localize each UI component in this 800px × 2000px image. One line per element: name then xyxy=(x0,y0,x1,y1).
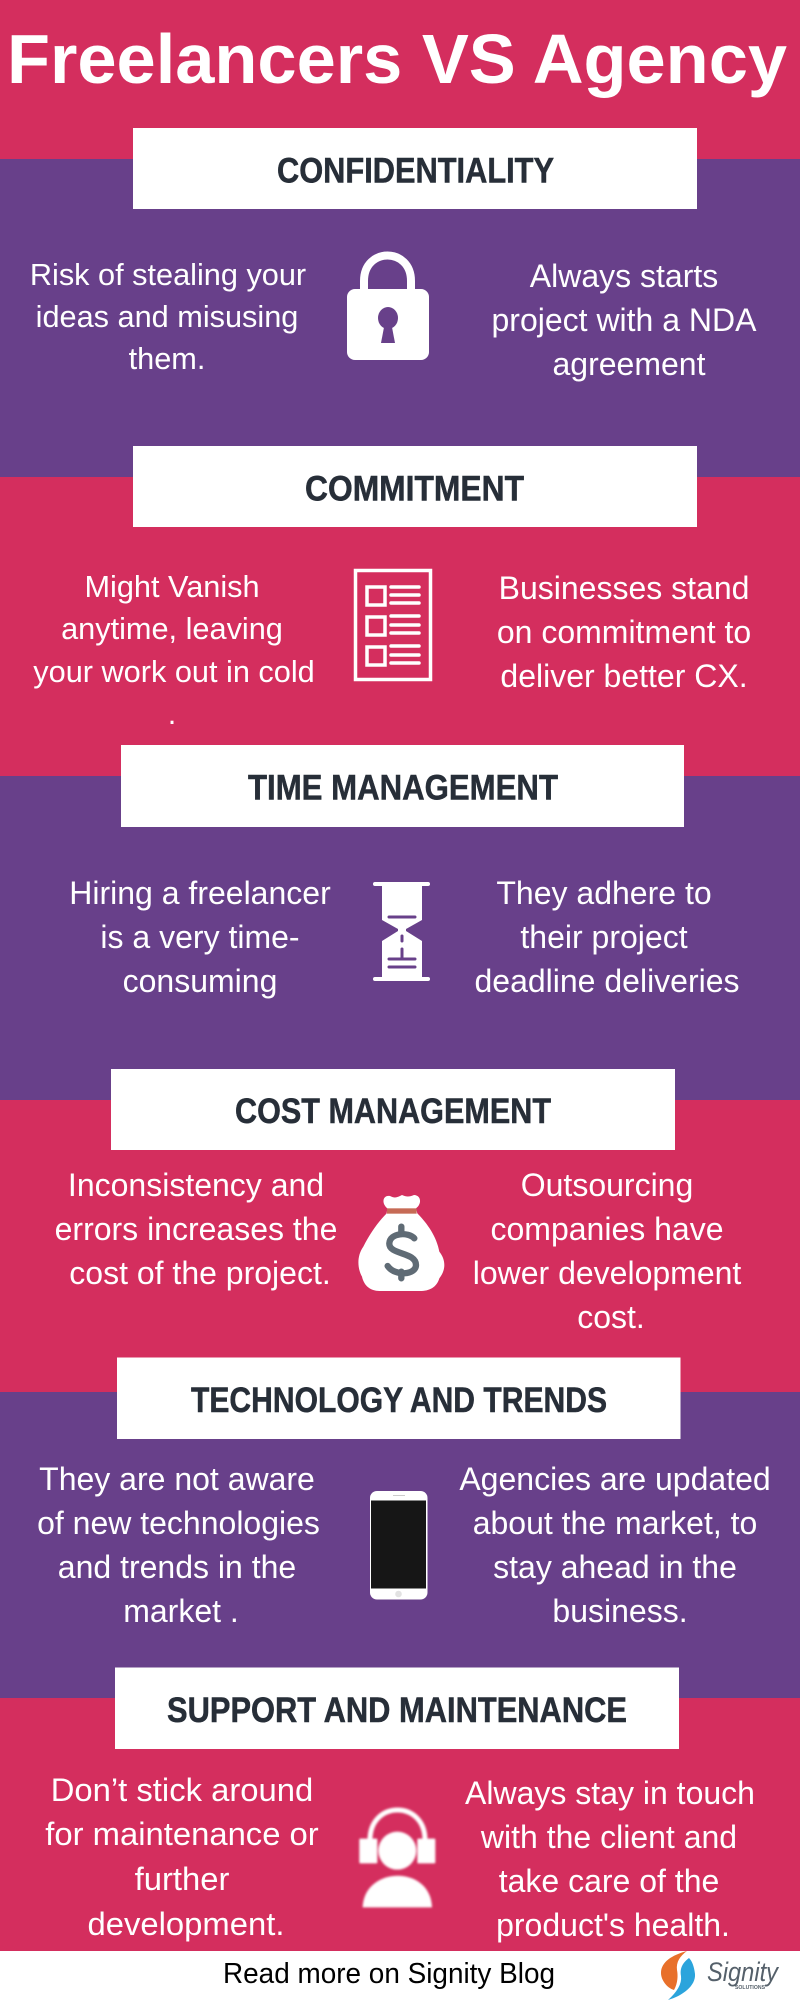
icon: smartphone xyxy=(370,1491,428,1600)
text: freelancer time: Hiring a freelancer xyxy=(69,875,331,911)
text: agency cost xyxy=(473,1167,741,1335)
panel: confidentiality xyxy=(30,128,757,382)
title: Freelancers VS Agency xyxy=(7,20,787,98)
text: agency cost: lower development xyxy=(473,1255,741,1291)
text: agency time xyxy=(474,875,740,999)
text: freelancer cost: cost of the project. xyxy=(69,1255,331,1291)
heading: technology and trends xyxy=(117,1358,680,1439)
heading: cost management: COST MANAGEMENT xyxy=(235,1091,551,1131)
text: freelancer commitment: anytime, leaving xyxy=(61,611,283,646)
text: agency cost: companies have xyxy=(490,1211,724,1247)
icon: checklist xyxy=(356,570,430,680)
text: agency support: Always stay in touch xyxy=(465,1775,755,1811)
text: freelancer time: is a very time- xyxy=(100,919,300,955)
heading: technology and trends: TECHNOLOGY AND TRENDS xyxy=(191,1380,607,1420)
text: agency confidentiality: project with a NDA xyxy=(492,302,757,338)
text: agency commitment xyxy=(497,570,751,694)
text: agency technology: Agencies are updated xyxy=(459,1461,771,1497)
text: freelancer technology: and trends in the xyxy=(58,1549,296,1585)
text: freelancer support: further xyxy=(135,1860,229,1897)
text: freelancer technology: market . xyxy=(123,1593,239,1629)
panel: commitment xyxy=(33,446,751,731)
text: freelancer commitment: Might Vanish xyxy=(84,569,260,604)
text: freelancer support: for maintenance or xyxy=(45,1815,319,1852)
text: agency confidentiality xyxy=(492,258,757,382)
logo: Signity: Signity xyxy=(707,1957,779,1987)
heading: confidentiality xyxy=(133,128,697,209)
text: agency time: deadline deliveries xyxy=(474,963,740,999)
heading: commitment xyxy=(133,446,697,527)
icon: hourglass xyxy=(373,882,430,981)
footer link text: Read more on Signity Blog xyxy=(223,1958,555,1990)
heading: time management: TIME MANAGEMENT xyxy=(248,768,558,808)
text: agency commitment: Businesses stand xyxy=(499,570,749,606)
text: freelancer cost xyxy=(55,1167,337,1291)
text: agency support: product's health. xyxy=(496,1907,730,1943)
text: freelancer confidentiality: them. xyxy=(129,341,205,376)
text: freelancer technology xyxy=(37,1461,320,1629)
text: agency time: their project xyxy=(520,919,688,955)
text: freelancer support: Don’t stick around xyxy=(51,1771,313,1808)
text: freelancer commitment: . xyxy=(168,696,176,731)
logo: Signity xyxy=(661,1951,779,2000)
text: agency technology: about the market, to xyxy=(473,1505,757,1541)
panel: technology and trends xyxy=(37,1358,771,1629)
heading: cost management xyxy=(111,1069,675,1150)
text: freelancer confidentiality: ideas and misusing xyxy=(36,299,298,334)
text: agency confidentiality: agreement xyxy=(553,346,706,382)
text: freelancer commitment xyxy=(33,569,315,731)
text: agency commitment: on commitment to xyxy=(497,614,751,650)
footer xyxy=(223,1951,779,2000)
heading: support and maintenance xyxy=(115,1668,679,1749)
text: freelancer time: consuming xyxy=(123,963,277,999)
text: agency commitment: deliver better CX. xyxy=(500,658,748,694)
icon: headset person xyxy=(359,1810,435,1907)
panel: support and maintenance xyxy=(45,1668,755,1943)
text: agency support: take care of the xyxy=(499,1863,719,1899)
text: freelancer time xyxy=(69,875,331,999)
text: agency technology xyxy=(459,1461,771,1629)
text: freelancer cost: errors increases the xyxy=(55,1211,337,1247)
text: freelancer confidentiality: Risk of stealing your xyxy=(30,257,306,292)
text: freelancer support xyxy=(45,1771,319,1942)
text: freelancer commitment: your work out in cold xyxy=(33,654,315,689)
text: agency cost: cost. xyxy=(577,1299,645,1335)
text: agency support: with the client and xyxy=(480,1819,737,1855)
text: freelancer technology: of new technologies xyxy=(37,1505,320,1541)
heading: commitment: COMMITMENT xyxy=(305,468,524,508)
text: agency confidentiality: Always starts xyxy=(530,258,718,294)
panel: cost management xyxy=(55,1069,741,1335)
text: agency time: They adhere to xyxy=(496,875,712,911)
text: freelancer cost: Inconsistency and xyxy=(68,1167,324,1203)
text: agency technology: stay ahead in the xyxy=(493,1549,737,1585)
heading: confidentiality: CONFIDENTIALITY xyxy=(277,150,554,190)
text: agency cost: Outsourcing xyxy=(521,1167,693,1203)
heading: support and maintenance: SUPPORT AND MAINTENANCE xyxy=(167,1690,627,1730)
heading: time management xyxy=(121,745,684,827)
text: freelancer technology: They are not aware xyxy=(39,1461,315,1497)
text: agency technology: business. xyxy=(552,1593,688,1629)
text: agency support xyxy=(465,1775,755,1943)
panel: time management xyxy=(69,745,740,999)
text: freelancer support: development. xyxy=(88,1905,284,1942)
icon: money bag xyxy=(358,1195,444,1291)
logo: Signity: SOLUTIONS xyxy=(735,1985,766,1991)
text: freelancer confidentiality xyxy=(30,257,306,376)
icon: padlock xyxy=(347,256,429,360)
